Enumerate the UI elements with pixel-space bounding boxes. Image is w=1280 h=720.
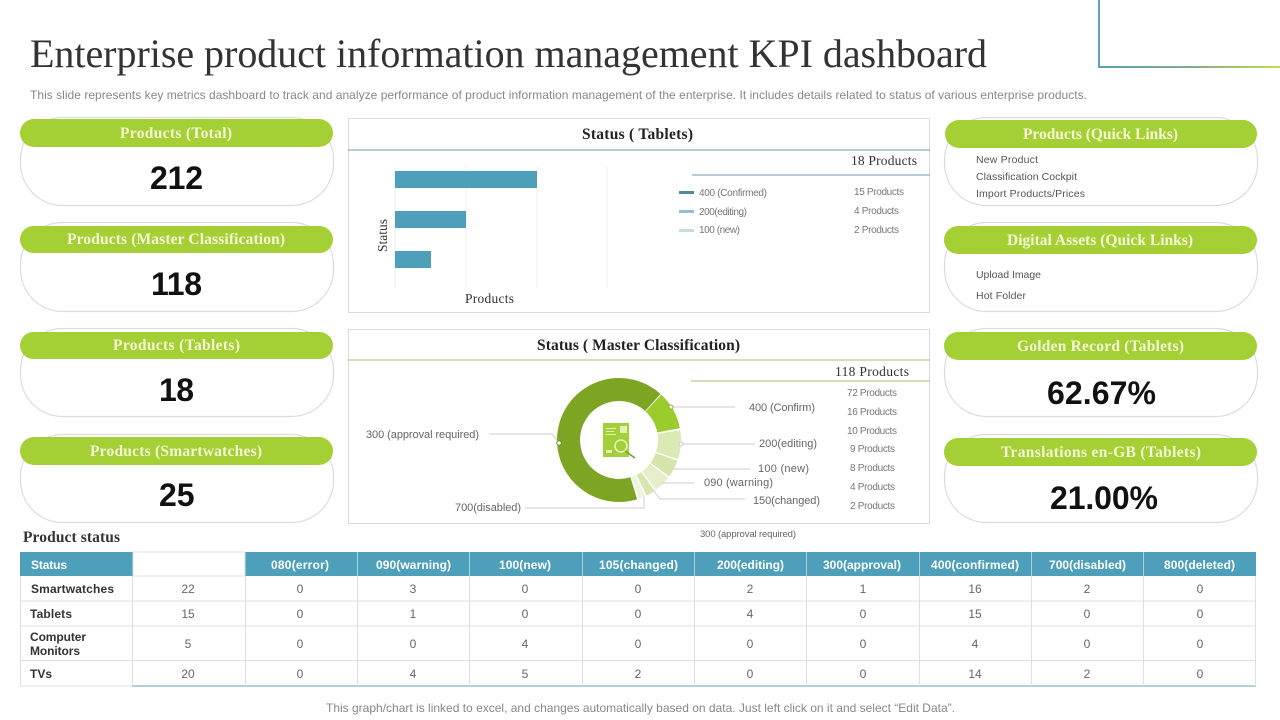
table header row: 400(confirmed) [931,558,1019,572]
row: computer monitors: 0 [1197,637,1204,651]
row: tablets: 0 [860,607,867,621]
row: computer monitors: 0 [410,637,417,651]
row: tvs: 2 [1084,667,1091,681]
KPI card: products tablets: Products (Tablets) [113,337,240,354]
legend: tablets status: 200(editing) [699,207,747,218]
total: 118 products: 118 Products [835,364,909,379]
legend: tablets status: 15 Products [854,187,904,198]
corner decoration [1098,0,1280,68]
row: smartwatches: 3 [410,582,417,596]
table header row: 800(deleted) [1164,558,1235,572]
KPI card: products smartwatches: Products (Smartwatches) [90,443,262,460]
product counts [847,388,897,512]
table header row: 100(new) [499,558,551,572]
table grid [20,576,1256,686]
table heading: Product status [23,529,120,546]
row: tablets [30,607,1204,621]
panel: status tablets [348,118,930,312]
row: smartwatches: 0 [635,582,642,596]
product counts: 9 Products [850,444,895,455]
table header row: 080(error) [271,558,329,572]
row: tvs: 0 [747,667,754,681]
icon: document with magnifier [603,423,635,458]
quick links card: digital assets: Upload Image [976,269,1041,281]
table header row: Status [31,558,67,572]
donut labels: 700(disabled) [455,502,521,514]
row: computer monitors: 0 [635,637,642,651]
row: tvs: 5 [522,667,529,681]
row: computer monitors: Monitors [30,644,80,658]
bar chart: tablets status [375,167,607,306]
row: tablets: 0 [297,607,304,621]
KPI card: golden record [944,328,1258,416]
quick links card: products: Import Products/Prices [976,188,1085,200]
KPI card: products tablets [20,328,334,416]
quick links card: digital assets [944,222,1258,312]
row: computer monitors: 0 [860,637,867,651]
row: tablets: 0 [522,607,529,621]
row: tvs: 4 [410,667,417,681]
product status table [20,552,1256,686]
KPI card: products total: Products (Total) [120,125,232,142]
table header row: 700(disabled) [1049,558,1126,572]
legend: tablets status: 400 (Confirmed) [699,188,767,199]
legend: tablets status [679,187,904,236]
donut labels: 400 (Confirm) [749,402,815,414]
row: tablets: 4 [747,607,754,621]
total: 18 products: 18 Products [851,153,917,168]
product counts: 10 Products [847,426,897,437]
row: computer monitors: 0 [297,637,304,651]
quick links card: products: Classification Cockpit [976,171,1077,183]
stray chart label: 300 (approval required) [700,529,796,540]
product counts: 8 Products [850,463,895,474]
product counts: 2 Products [850,501,895,512]
row: smartwatches: 1 [860,582,867,596]
panel: status master classification [348,330,930,524]
table header row: 105(changed) [599,558,678,572]
product counts: 16 Products [847,407,897,418]
table header row: 200(editing) [717,558,784,572]
KPI card: translations: Translations en-GB (Tablets) [1001,444,1201,461]
row: computer monitors: 0 [747,637,754,651]
donut labels: 100 (new) [758,463,809,475]
row: tablets: 0 [635,607,642,621]
panel heading: status master classification: Status ( Master Classification) [537,337,740,354]
row: tablets: 0 [1197,607,1204,621]
row: smartwatches: 2 [1084,582,1091,596]
donut labels: 090 (warning) [704,477,773,489]
subtitle: This slide represents key metrics dashboard to track and analyze performance of product information management of the enterprise. It includes details related to status of various enterprise products. [30,88,1087,102]
donut chart: master classification [548,369,690,511]
row: computer monitors: 5 [185,637,192,651]
row: computer monitors: 0 [1084,637,1091,651]
donut labels: 300 (approval required) [366,429,479,441]
KPI card: golden record: Golden Record (Tablets) [1017,338,1184,355]
KPI card: products master classification: Products (Master Classification) [67,231,285,248]
donut labels [366,402,820,514]
row: computer monitors: Computer [30,630,86,644]
donut leader lines [489,405,755,508]
donut labels: 200(editing) [759,438,817,450]
row: smartwatches: 0 [297,582,304,596]
table header row: 090(warning) [376,558,451,572]
row: computer monitors: 4 [522,637,529,651]
row: smartwatches: Smartwatches [31,582,114,596]
KPI card: translations [944,434,1258,522]
quick links card: products: New Product [976,154,1038,166]
legend: tablets status: 100 (new) [699,225,740,236]
row: smartwatches [31,582,1204,596]
row: computer monitors [30,630,1204,658]
KPI card: products master classification [20,222,334,312]
donut labels: 150(changed) [753,495,820,507]
quick links card: digital assets: Hot Folder [976,290,1026,302]
table header row [20,552,1256,576]
legend: tablets status: 4 Products [854,206,899,217]
footer note: This graph/chart is linked to excel, and changes automatically based on data. Just left click on it and select “Edit Data”. [326,701,955,715]
product counts: 4 Products [850,482,895,493]
row: tablets: 1 [410,607,417,621]
row: smartwatches: 0 [522,582,529,596]
quick links card: products: Products (Quick Links) [1023,126,1178,143]
table header row: 300(approval) [823,558,901,572]
row: tvs: 20 [181,667,195,681]
row: tvs: TVs [30,667,52,681]
row: tvs: 14 [968,667,982,681]
row: tvs: 0 [1197,667,1204,681]
row: smartwatches: 16 [968,582,982,596]
row: tvs: 0 [860,667,867,681]
row: tablets: Tablets [30,607,72,621]
bar chart: tablets status: Status [375,219,390,252]
row: smartwatches: 22 [181,582,195,596]
row: tvs: 2 [635,667,642,681]
title: Enterprise product information management KPI dashboard [30,31,987,76]
quick links card: products [944,118,1258,206]
KPI card: products smartwatches: 25 [159,477,195,513]
quick links card: digital assets: Digital Assets (Quick Links) [1007,232,1193,249]
row: tablets: 15 [181,607,195,621]
row: tablets: 0 [1084,607,1091,621]
KPI card: products master classification: 118 [151,266,202,302]
row: smartwatches: 0 [1197,582,1204,596]
product counts: 72 Products [847,388,897,399]
row: tvs: 0 [297,667,304,681]
KPI card: golden record: 62.67% [1047,375,1156,411]
row: smartwatches: 2 [747,582,754,596]
legend: tablets status: 2 Products [854,225,899,236]
KPI card: translations: 21.00% [1050,480,1158,516]
KPI card: products tablets: 18 [159,372,194,408]
KPI card: products smartwatches [20,434,334,522]
row: tablets: 15 [968,607,982,621]
KPI card: products total: 212 [150,160,203,196]
row: tvs [30,667,1204,681]
row: computer monitors: 4 [972,637,979,651]
panel heading: status tablets: Status ( Tablets) [582,126,693,143]
bar chart: tablets status: Products [465,291,514,306]
KPI card: products total [20,118,334,206]
